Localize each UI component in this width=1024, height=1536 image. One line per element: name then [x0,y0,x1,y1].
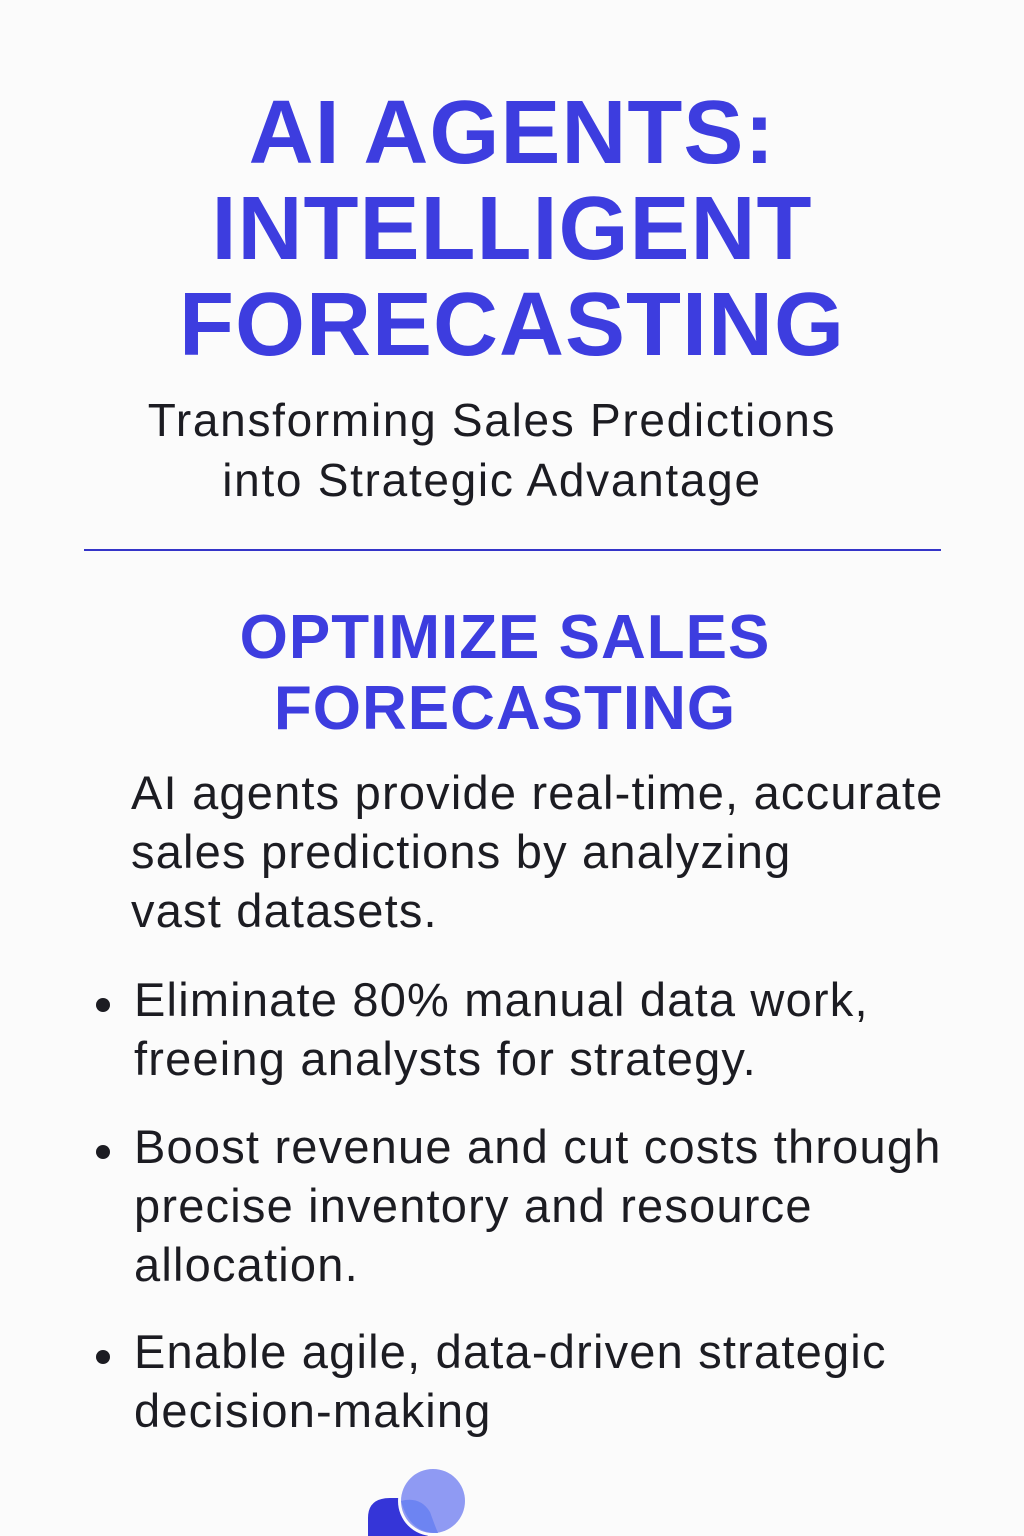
subtitle: Transforming Sales Predictions [148,394,836,446]
subtitle [148,394,836,506]
bullet list: allocation. [134,1238,359,1291]
bullet list: Boost revenue and cut costs through [134,1120,942,1173]
title [179,83,845,375]
intro paragraph [131,766,943,937]
title: FORECASTING [179,275,845,375]
subtitle: into Strategic Advantage [222,454,762,506]
section heading: FORECASTING [274,674,736,743]
bullet list: Enable agile, data-driven strategic [134,1325,887,1378]
intro paragraph: vast datasets. [131,884,438,937]
bullet list: freeing analysts for strategy. [134,1032,757,1085]
intro paragraph: sales predictions by analyzing [131,825,791,878]
bullet 2 [96,1120,942,1291]
bullet list [96,973,942,1437]
title: AI AGENTS: [249,83,775,183]
bullet list: decision-making [134,1384,492,1437]
intro paragraph: AI agents provide real-time, accurate [131,766,943,819]
icon: logo [368,1469,465,1536]
title: INTELLIGENT [212,179,812,279]
section heading [240,603,770,743]
bullet list: Eliminate 80% manual data work, [134,973,869,1026]
bullet 3 [96,1325,887,1437]
section heading: OPTIMIZE SALES [240,603,770,672]
bullet 1 [96,973,869,1085]
bullet list: precise inventory and resource [134,1179,813,1232]
